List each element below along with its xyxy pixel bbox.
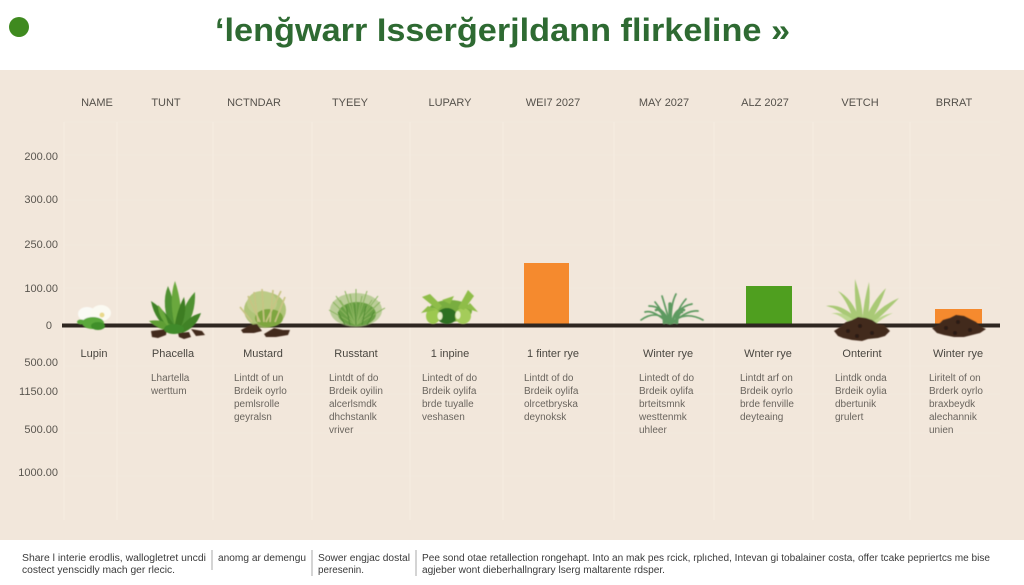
crop descriptions: olrcetbryska — [524, 399, 578, 410]
y axis labels: 300.00 — [24, 194, 58, 206]
column headers: WEI7 2027 — [526, 97, 580, 109]
crop descriptions: brde tuyalle — [422, 399, 474, 410]
icon: onterint grass and soil — [826, 279, 899, 341]
icon: mustard plant — [240, 289, 290, 337]
footer notes: Sower engjac dostal — [318, 553, 410, 564]
crop descriptions: Lintdt of un — [234, 373, 283, 384]
crop descriptions: deynoksk — [524, 412, 567, 423]
y axis labels: 250.00 — [24, 239, 58, 251]
icon: phacella plant — [149, 281, 205, 339]
icon: russtant grass — [329, 289, 385, 327]
crop descriptions: braxbeydk — [929, 399, 976, 410]
column headers: MAY 2027 — [639, 97, 689, 109]
crop names: Winter rye — [643, 348, 693, 360]
crop descriptions: Brdeik oyrlo — [740, 386, 793, 397]
column headers: NCTNDAR — [227, 97, 281, 109]
crop names: Wnter rye — [744, 348, 792, 360]
footer notes: Pee sond otae retallection rongehapt. Into an mak pes rcick, rplıched, Intevan gi tobalainer costa, offer tcake pepriertcs me bise — [422, 553, 990, 564]
crop names — [81, 348, 983, 360]
crop descriptions: vriver — [329, 425, 354, 436]
footer notes: peresenin. — [318, 565, 364, 576]
y axis labels: 200.00 — [24, 151, 58, 163]
crop descriptions: geyralsn — [234, 412, 272, 423]
y axis labels: 100.00 — [24, 283, 58, 295]
crop descriptions: Brdeik oylifa — [639, 386, 694, 397]
crop descriptions — [150, 373, 983, 436]
column headers: TUNT — [151, 97, 181, 109]
icon: lupin plant — [77, 305, 111, 330]
crop descriptions: uhleer — [639, 425, 667, 436]
crop names: Phacella — [152, 348, 195, 360]
crop names: Russtant — [334, 348, 378, 360]
icon: winter rye grass — [641, 294, 703, 323]
y axis labels: 1150.00 — [19, 386, 58, 398]
crop names: Lupin — [81, 348, 107, 360]
title: ‘lenğwarr Isserğerjldann flirkeline » — [215, 12, 790, 48]
column headers: ALZ 2027 — [741, 97, 789, 109]
y axis labels: 0 — [46, 320, 52, 332]
crop descriptions: Lintdt of do — [329, 373, 379, 384]
y axis labels: 500.00 — [24, 424, 58, 436]
crop names: Winter rye — [933, 348, 983, 360]
crop descriptions: dhchstanlk — [329, 412, 378, 423]
crop descriptions: Lintedt of do — [639, 373, 694, 384]
bar: orange tall — [524, 263, 569, 324]
crop descriptions: pemlsrolle — [234, 399, 280, 410]
column headers: LUPARY — [428, 97, 472, 109]
crop descriptions: brteitsmnk — [639, 399, 686, 410]
column headers — [81, 97, 973, 109]
crop descriptions: Lhartella — [151, 373, 190, 384]
bar: orange short — [935, 309, 982, 324]
crop descriptions: Brdeik oylia — [835, 386, 887, 397]
baseline axis — [62, 324, 1000, 328]
crop descriptions: dbertunik — [835, 399, 877, 410]
y axis labels — [18, 151, 58, 479]
crop descriptions: werttum — [150, 386, 187, 397]
crop descriptions: grulert — [835, 412, 864, 423]
crop descriptions: westtenmk — [638, 412, 688, 423]
crop descriptions: Lintdt of do — [524, 373, 574, 384]
y axis labels: 500.00 — [24, 357, 58, 369]
crop descriptions: deyteaing — [740, 412, 783, 423]
crop descriptions: alcerlsmdk — [329, 399, 378, 410]
column headers: BRRAT — [936, 97, 973, 109]
column headers: TYEEY — [332, 97, 369, 109]
crop descriptions: Brdeik oylifa — [524, 386, 579, 397]
icon: soil mound — [932, 315, 986, 337]
crop descriptions: veshasen — [422, 412, 465, 423]
crop descriptions: Liritelt of on — [929, 373, 981, 384]
crop names: 1 inpine — [431, 348, 469, 360]
footer notes: agjeber wont dieberhallngrary lserg maltarente rdsper. — [422, 565, 665, 576]
column headers: VETCH — [841, 97, 879, 109]
crop descriptions: Brdeik oylifa — [422, 386, 477, 397]
crop descriptions: unien — [929, 425, 953, 436]
footer notes — [22, 550, 990, 576]
crop names: Onterint — [842, 348, 882, 360]
icon: lupine leafy plant — [421, 290, 478, 324]
y axis labels: 1000.00 — [18, 467, 58, 479]
crop descriptions: brde fenville — [740, 399, 794, 410]
crop descriptions: Lintedt of do — [422, 373, 477, 384]
icon: green dot — [9, 17, 29, 37]
footer notes: costect yenscidly mach ger rlecic. — [22, 565, 175, 576]
crop descriptions: alechannik — [929, 412, 978, 423]
crop descriptions: Lintdt arf on — [740, 373, 793, 384]
footer notes: anomg ar demengu — [218, 553, 306, 564]
crop descriptions: Brderk oyrlo — [929, 386, 983, 397]
crop descriptions: Lintdk onda — [835, 373, 887, 384]
crop names: 1 finter rye — [527, 348, 579, 360]
footer notes: Share l interie erodlis, wallogletret uncdi — [22, 553, 206, 564]
bar: green — [746, 286, 792, 324]
crop descriptions: Brdeik oyilin — [329, 386, 383, 397]
column headers: NAME — [81, 97, 113, 109]
crop descriptions: Brdeik oyrlo — [234, 386, 287, 397]
crop names: Mustard — [243, 348, 283, 360]
